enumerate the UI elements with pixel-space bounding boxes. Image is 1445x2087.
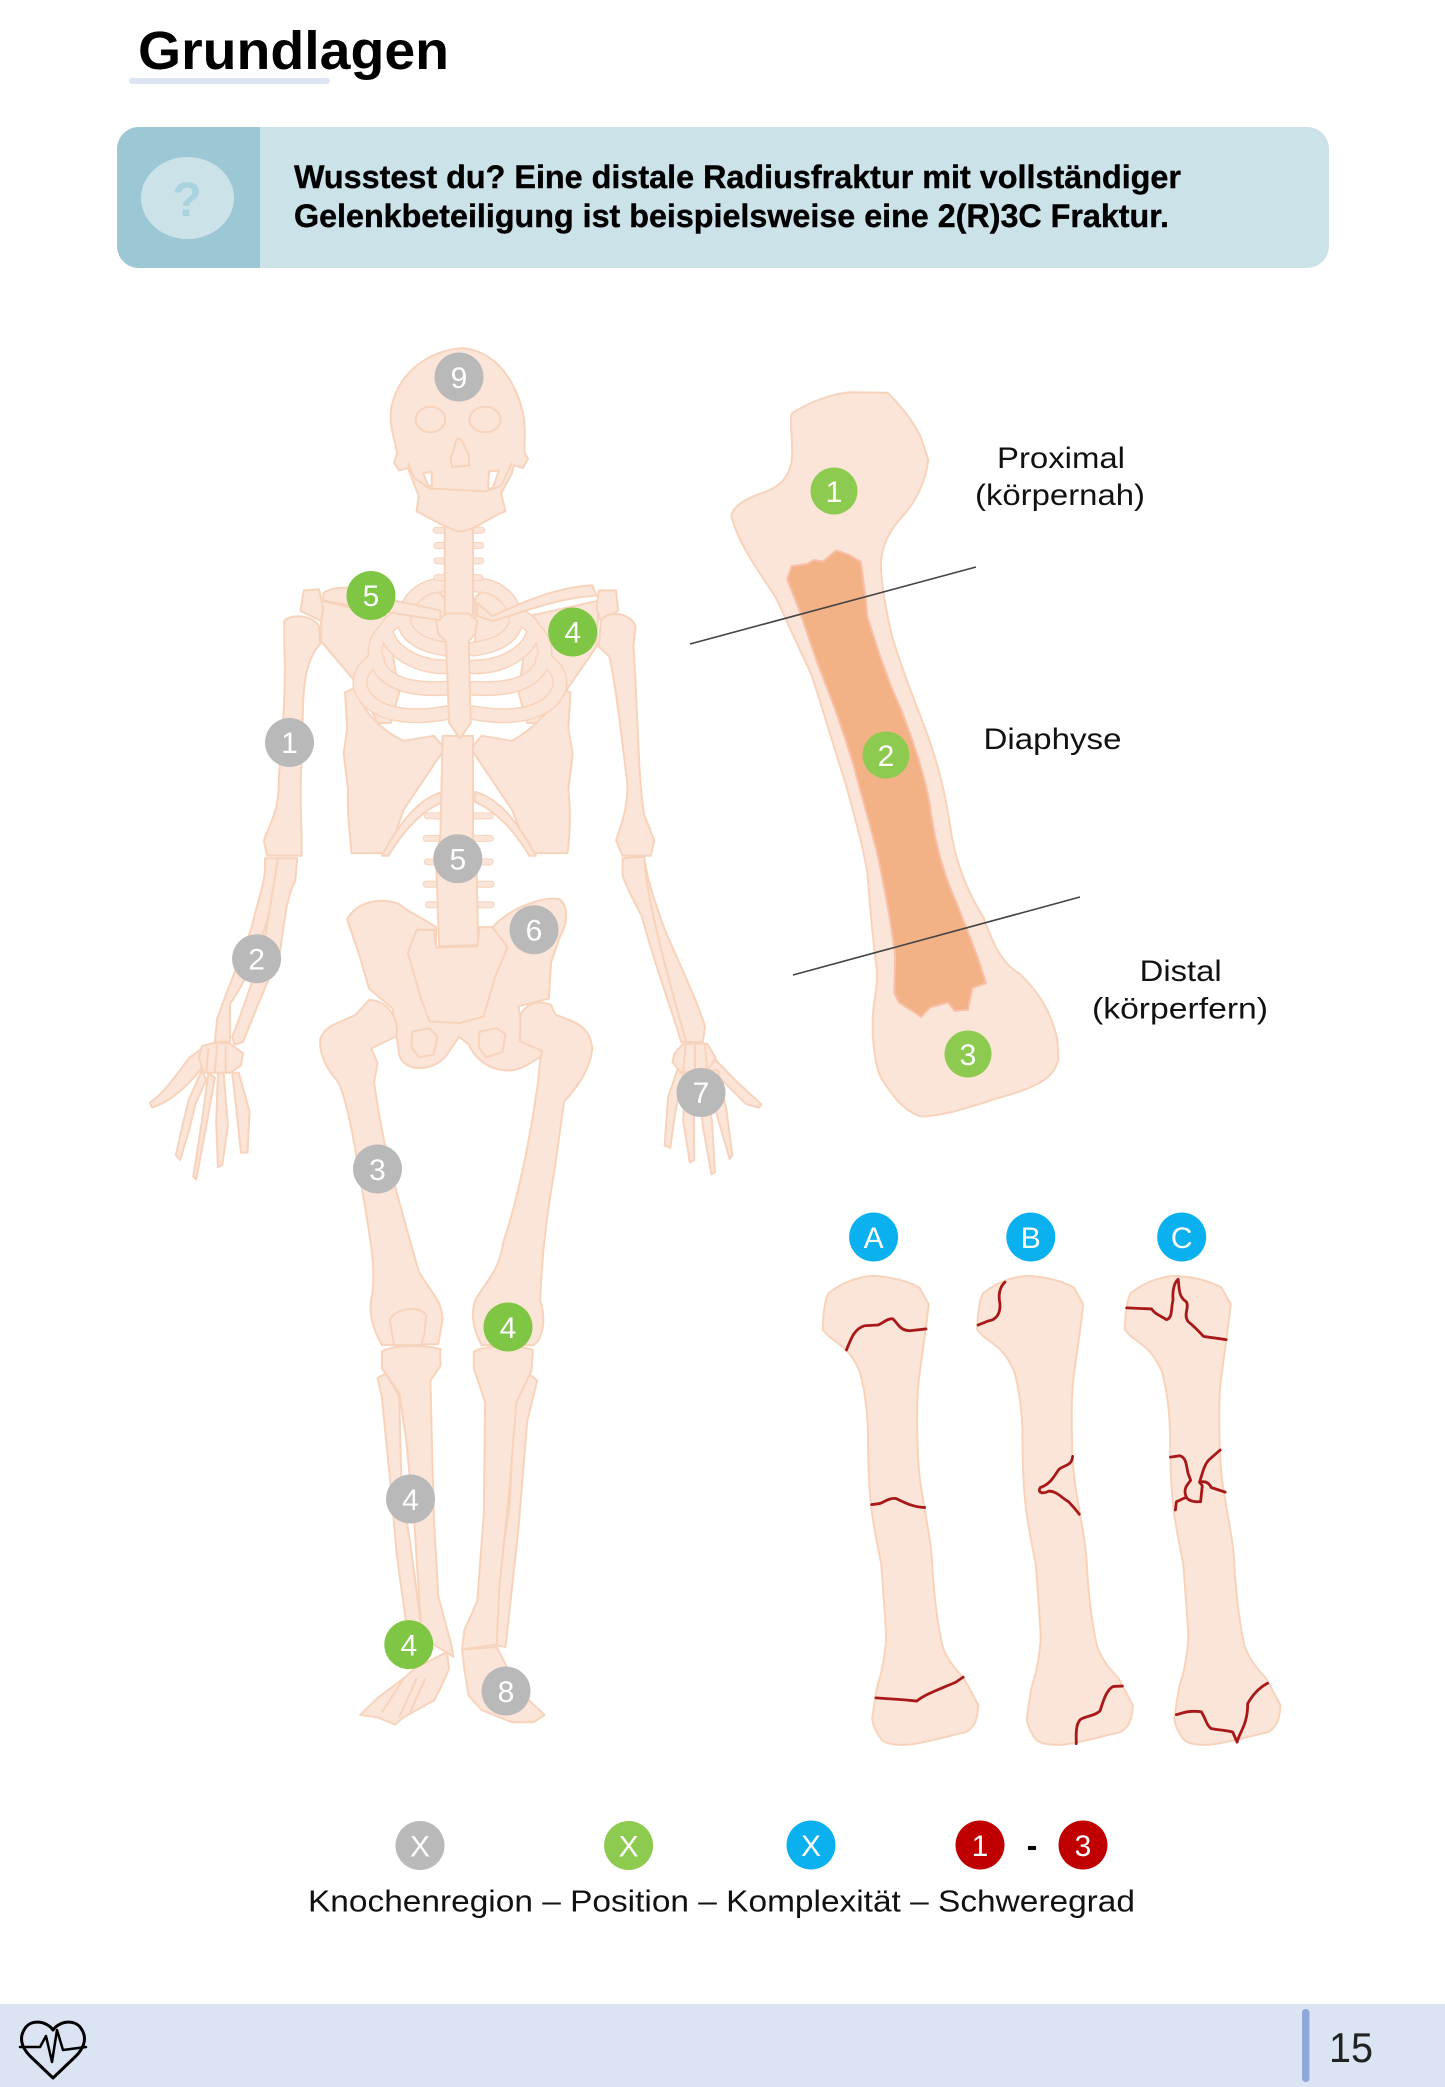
green marker: 5 shoulder: 5	[363, 580, 379, 613]
label: distal: Distal	[1140, 955, 1222, 988]
grey marker: 5 spine: 5	[449, 844, 466, 876]
legend marker: position	[604, 1821, 653, 1870]
page number: 15	[1329, 2024, 1373, 2071]
femur bone shape	[731, 392, 1059, 1116]
bone A with fractures	[823, 1276, 978, 1745]
green marker: 4 knee: 4	[500, 1312, 516, 1345]
callout: did you know: Wusstest du? Eine distale Radiusfraktur mit vollständiger	[294, 159, 1181, 195]
green marker: 4 shoulder: 4	[564, 616, 581, 650]
grey marker: 5 spine	[433, 834, 482, 883]
grey marker: 2 forearm: 2	[248, 944, 265, 976]
legend marker: position: X	[619, 1830, 639, 1864]
grey marker: 9 skull	[434, 352, 484, 402]
grey marker: 3 femur	[353, 1144, 402, 1194]
grey marker: 8 foot	[482, 1666, 530, 1716]
green marker: 1 proximal: 1	[826, 476, 842, 509]
blue marker: C: C	[1171, 1222, 1193, 1255]
legend dash	[1028, 1846, 1036, 1850]
blue marker: C	[1157, 1212, 1206, 1262]
label: proximal: Proximal	[997, 442, 1125, 475]
grey marker: 8 foot: 8	[498, 1676, 514, 1709]
distal boundary line	[793, 897, 1080, 975]
grey marker: 1 humerus	[265, 718, 314, 767]
green marker: 3 distal: 3	[960, 1039, 976, 1072]
legend: classification key	[308, 1820, 1135, 1918]
bone C with fractures	[1125, 1276, 1281, 1745]
legend marker: bone region: X	[410, 1830, 430, 1864]
icon: heart with pulse	[20, 2022, 86, 2078]
grey marker: 4 lower leg: 4	[402, 1484, 419, 1517]
green marker: 4 ankle: 4	[400, 1630, 417, 1662]
grey marker: 2 forearm	[232, 934, 281, 983]
label: proximal: (körpernah)	[975, 479, 1145, 512]
legend marker: complexity	[786, 1820, 836, 1870]
bone B with fractures	[977, 1276, 1133, 1745]
green marker: 2 diaphysis: 2	[878, 740, 894, 773]
grey marker: 3 femur: 3	[369, 1154, 386, 1187]
femur diagram: proximal, diaphysis, distal	[690, 392, 1268, 1116]
footer bar	[0, 2004, 1445, 2087]
label: distal	[1092, 955, 1268, 1026]
grey marker: 1 humerus: 1	[281, 727, 298, 760]
legend marker: severity 3	[1058, 1820, 1108, 1870]
green marker: 4 shoulder	[548, 608, 597, 656]
label: diaphysis: Diaphyse	[984, 723, 1122, 756]
grey marker: 6 pelvis	[510, 905, 558, 954]
green marker: 5 shoulder	[346, 571, 396, 620]
green marker: 4 ankle	[384, 1620, 433, 1669]
legend marker: severity 1	[956, 1820, 1004, 1870]
green marker: 3 distal	[944, 1030, 992, 1078]
legend marker: severity 3: 3	[1075, 1830, 1091, 1863]
grey marker: 4 lower leg	[386, 1474, 435, 1524]
page number divider	[1302, 2009, 1310, 2082]
blue marker: A: A	[864, 1222, 884, 1255]
callout: did you know: Gelenkbeteiligung ist beispielsweise eine 2(R)3C Fraktur.	[294, 198, 1169, 234]
blue marker: B: B	[1021, 1222, 1041, 1255]
blue marker: B	[1006, 1212, 1055, 1262]
legend caption: Knochenregion – Position – Komplexität – Schweregrad	[308, 1884, 1135, 1918]
grey marker: 7 hand: 7	[693, 1077, 709, 1110]
skeleton lower body	[150, 1000, 761, 1725]
label: distal: (körperfern)	[1092, 992, 1268, 1026]
fracture complexity diagrams	[823, 1212, 1281, 1745]
green marker: 1 proximal	[810, 468, 858, 514]
proximal boundary line	[690, 567, 976, 644]
grey marker: 6 pelvis: 6	[526, 914, 542, 948]
callout: did you know: ?	[172, 174, 202, 227]
label: proximal	[975, 442, 1145, 512]
blue marker: A	[849, 1212, 898, 1262]
grey marker: 9 skull: 9	[451, 362, 467, 395]
title: Grundlagen	[138, 21, 449, 81]
green marker: 4 knee	[484, 1302, 532, 1352]
legend marker: complexity: X	[801, 1830, 821, 1863]
green marker: 2 diaphysis	[862, 732, 910, 778]
skeleton	[150, 348, 761, 1725]
legend marker: bone region	[396, 1821, 444, 1870]
legend marker: severity 1: 1	[972, 1830, 988, 1863]
skeleton upper body	[215, 348, 705, 1070]
callout: did you know	[117, 127, 1329, 268]
grey marker: 7 hand	[676, 1068, 726, 1117]
